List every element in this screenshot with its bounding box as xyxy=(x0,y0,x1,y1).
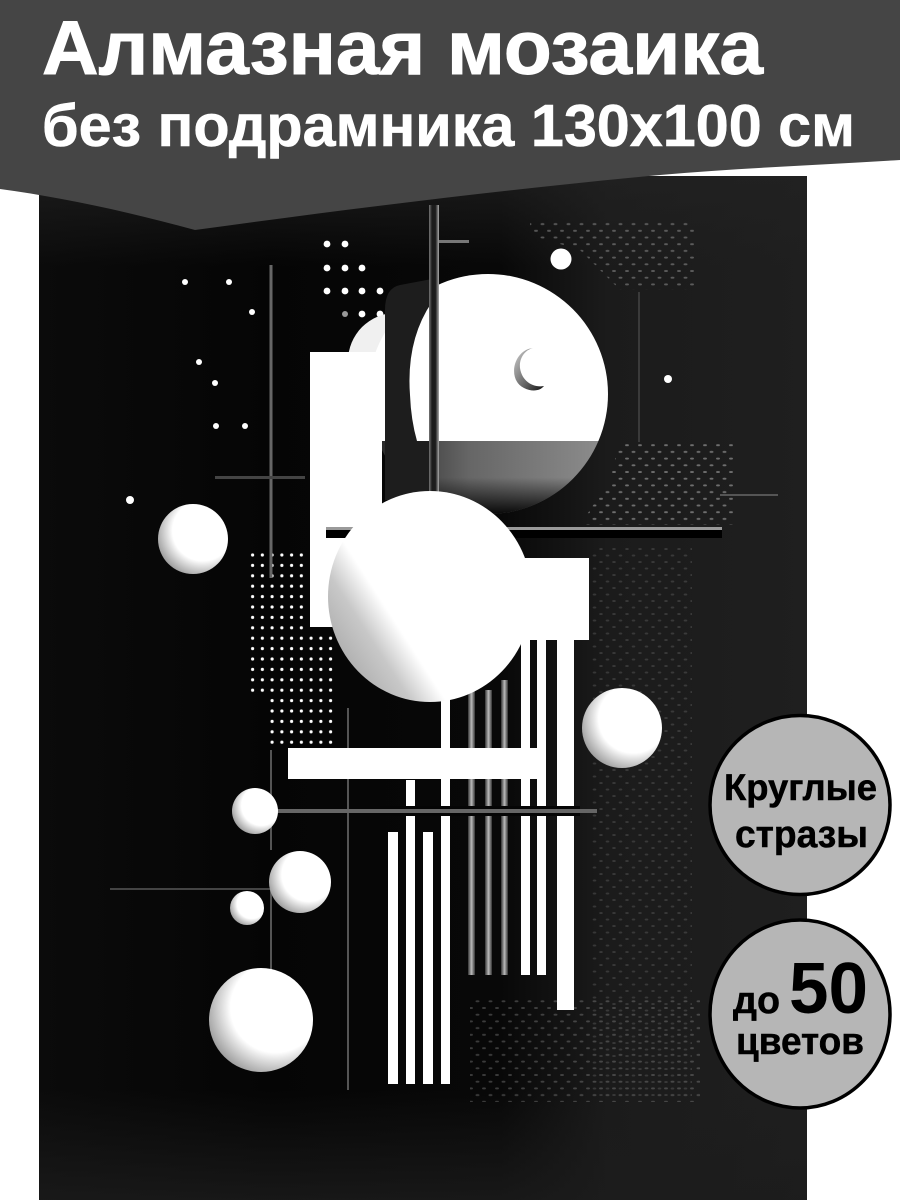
white dots small group xyxy=(126,241,672,504)
badge: round rhinestones: стразы xyxy=(735,814,868,856)
long vertical rod xyxy=(429,205,439,495)
spheres xyxy=(158,504,662,1072)
banner xyxy=(0,0,900,230)
white rectangle right xyxy=(522,558,589,640)
horizontal bar xyxy=(326,527,722,538)
badge: up to 50 colours: 50 xyxy=(789,949,868,1029)
halftone dot fields xyxy=(470,222,735,1102)
badge: round rhinestones: Круглые xyxy=(724,767,877,808)
title line two: без подрамника 130х100 см xyxy=(42,93,855,159)
cross line with gap xyxy=(275,806,597,816)
white rectangle left xyxy=(310,352,384,627)
badge: round rhinestones xyxy=(710,716,890,894)
white horizontal beam xyxy=(288,748,538,779)
dark arch xyxy=(385,279,432,500)
badge: up to 50 colours: цветов xyxy=(736,1021,864,1063)
vertical stripes xyxy=(388,640,574,1084)
badge: up to 50 colours xyxy=(710,920,890,1108)
big central sphere xyxy=(328,491,532,702)
artwork poster xyxy=(39,176,807,1200)
large half circle xyxy=(368,274,608,514)
badge: up to 50 colours: до xyxy=(733,980,780,1022)
thin lines xyxy=(110,240,778,1090)
white circle behind xyxy=(348,314,385,352)
white dot grid left xyxy=(248,550,335,745)
title line one: Алмазная мозаика xyxy=(42,6,764,91)
crescent xyxy=(514,348,544,390)
